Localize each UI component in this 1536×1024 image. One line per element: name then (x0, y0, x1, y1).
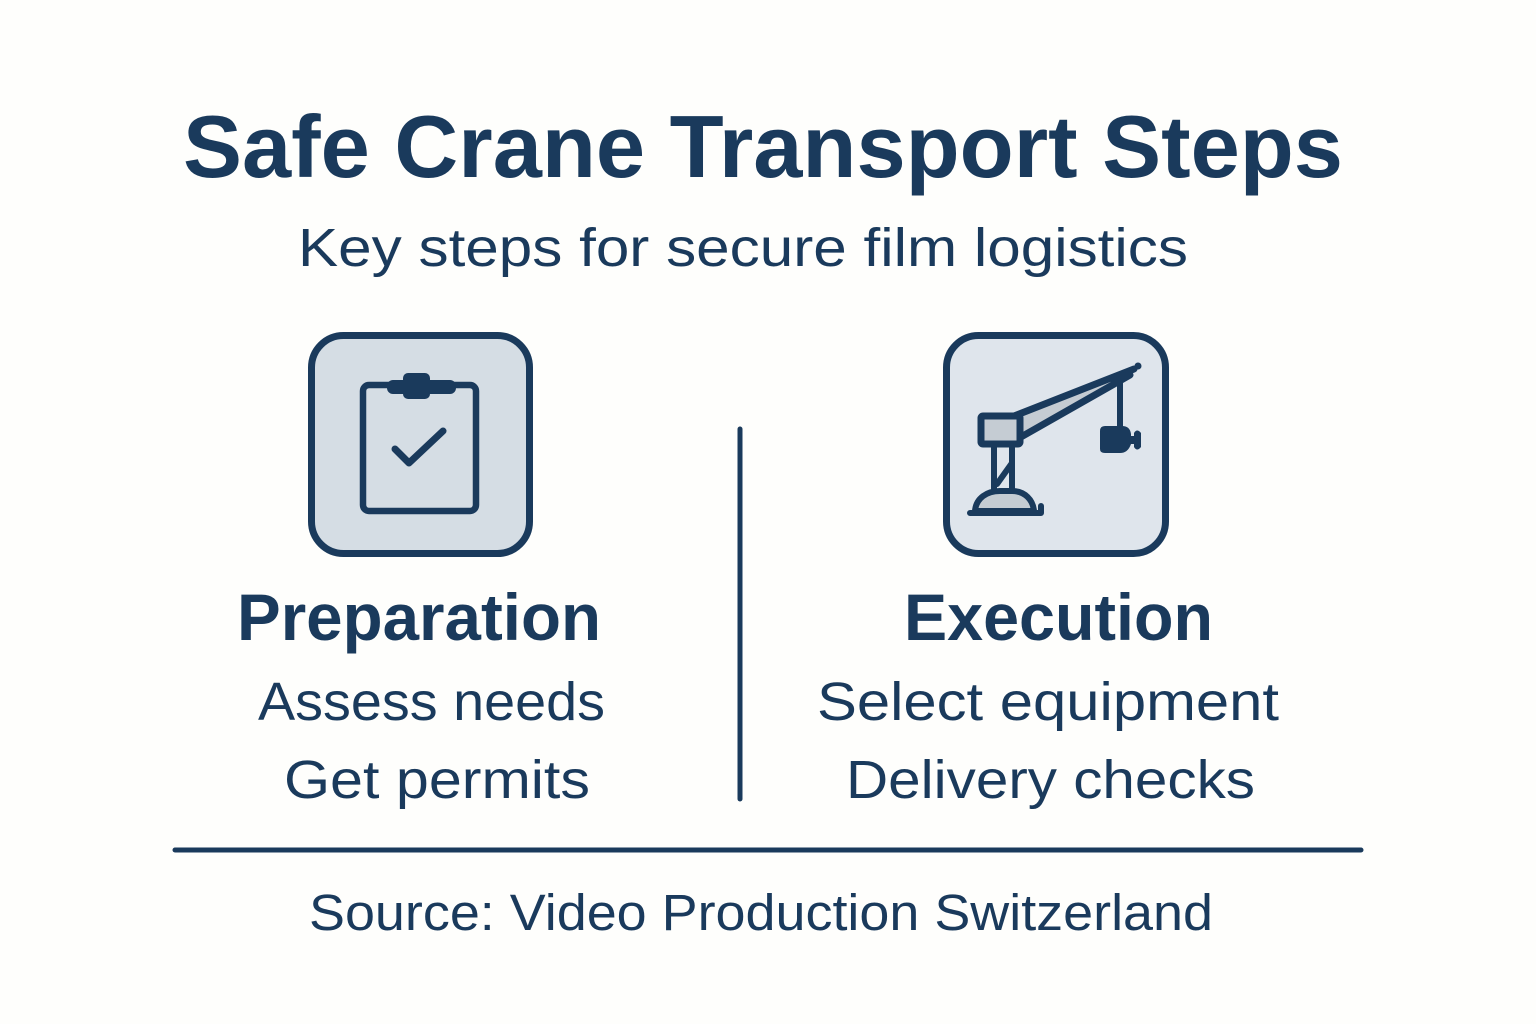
text: get permits: Get permits (284, 750, 590, 810)
icon: crane with camera (946, 336, 1166, 554)
subtitle: Key steps for secure film logistics (298, 218, 1188, 278)
title: Safe Crane Transport Steps (183, 97, 1343, 196)
text: select equipment: Select equipment (817, 672, 1279, 732)
heading: preparation: Preparation (237, 580, 601, 654)
source line: Source: Video Production Switzerland (309, 884, 1213, 941)
text: assess needs: Assess needs (258, 672, 605, 732)
vertical divider (738, 429, 742, 799)
horizontal rule (175, 848, 1361, 852)
text: delivery checks: Delivery checks (846, 750, 1255, 810)
icon: clipboard with checkmark (312, 336, 530, 554)
heading: execution: Execution (904, 580, 1213, 654)
